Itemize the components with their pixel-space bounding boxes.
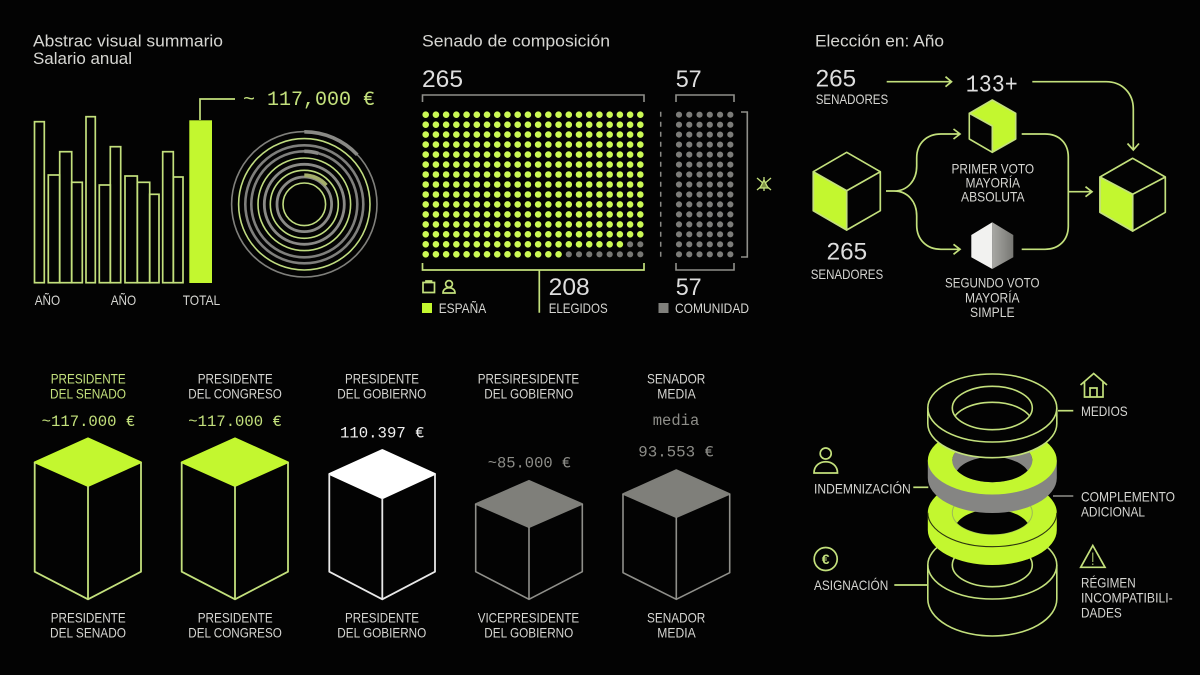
label: primer voto: MAYORÍA (966, 174, 1021, 190)
label: primer voto: PRIMER VOTO (952, 160, 1034, 176)
top label: PRESIDENTE (345, 370, 419, 386)
bottom label: DEL GOBIERNO (337, 625, 426, 641)
bar chart: yearly outline bars (34, 117, 183, 283)
axis labels: AÑO (111, 292, 136, 308)
column: presidente del congreso (182, 370, 288, 641)
cube: result (1100, 158, 1165, 231)
value label: ~ 117,000 € (243, 89, 375, 112)
axis labels: AÑO (35, 292, 60, 308)
top label: DEL SENADO (50, 385, 126, 401)
dot matrix: community seats (679, 115, 730, 254)
ring: green lower (927, 496, 1058, 565)
top label (478, 370, 579, 401)
icon: document (423, 281, 434, 292)
number 208 elegidos (549, 274, 608, 316)
arrow to result cube (1032, 82, 1139, 150)
label: regimen: DADES (1081, 604, 1122, 620)
panel: salario anual (33, 32, 377, 308)
top label (647, 370, 705, 401)
cube: second vote (971, 222, 1013, 269)
icon: warning (1081, 546, 1105, 567)
column: presidente del senado (35, 370, 141, 641)
top label (188, 370, 282, 401)
label: primer voto (952, 160, 1034, 204)
cube (182, 438, 288, 599)
dashed divider (660, 112, 662, 257)
label: segundo voto (945, 275, 1040, 320)
label: primer voto: ABSOLUTA (961, 188, 1025, 204)
axis labels: TOTAL (183, 292, 220, 308)
label: regimen: RÉGIMEN (1081, 574, 1136, 590)
cube (35, 438, 141, 599)
bottom label: PRESIDENTE (51, 610, 126, 626)
number 57 top: 57 (676, 66, 702, 93)
legend: comunidad: COMUNIDAD (675, 300, 749, 316)
label: asignacion: ASIGNACIÓN (814, 577, 888, 593)
top label: PRESIDENTE (51, 370, 126, 386)
cube: start (813, 152, 880, 230)
ring: top outline (928, 374, 1057, 458)
bottom label: PRESIDENTE (345, 610, 419, 626)
bottom label: DEL GOBIERNO (484, 625, 573, 641)
radial ring chart (232, 132, 377, 277)
value: ~117.000 € (188, 413, 282, 431)
bottom label: MEDIA (657, 625, 696, 641)
total bar (189, 120, 212, 283)
number 208 elegidos: 208 (549, 274, 590, 301)
label: complemento adicional: COMPLEMENTO (1081, 489, 1175, 505)
brackets (422, 95, 747, 270)
icon: person (814, 448, 838, 473)
bottom label: SENADOR (647, 610, 705, 626)
column: vicepresidente del gobierno (476, 370, 582, 641)
label: segundo voto: MAYORÍA (965, 289, 1020, 305)
value: 93.553 € (638, 444, 714, 462)
value: ~85.000 € (488, 455, 571, 473)
number 265 senadores bottom: SENADORES (811, 266, 883, 282)
panel: ring stack (814, 374, 1175, 636)
number 265 senadores top: 265 (816, 66, 856, 93)
bottom label: PRESIDENTE (198, 610, 273, 626)
top label: DEL GOBIERNO (484, 385, 573, 401)
label: complemento adicional: ADICIONAL (1081, 504, 1145, 520)
number 57 bottom: 57 (676, 274, 702, 301)
number 133+: 133+ (966, 72, 1018, 100)
arrow to 133+ (887, 77, 952, 87)
icon: person (443, 281, 455, 293)
label: medios: MEDIOS (1081, 403, 1128, 419)
heading: composicion: Senado de composición (422, 32, 610, 50)
axis labels (35, 292, 220, 308)
label: complemento adicional (1053, 489, 1175, 520)
branch arrows (886, 129, 960, 254)
top label: DEL CONGRESO (188, 385, 282, 401)
ring: bottom outline (928, 531, 1057, 636)
cube (329, 450, 435, 599)
bottom label (188, 610, 282, 641)
number 265 senadores bottom (811, 238, 883, 282)
column: presidente del gobierno (329, 370, 435, 641)
heading: salario anual: Abstrac visual summario (33, 32, 223, 50)
number 265 senadores top: SENADORES (816, 91, 888, 107)
number 265 senadores bottom: 265 (827, 238, 867, 266)
panel: comparativa de salarios (35, 370, 730, 641)
dot matrix: Spain seats (426, 115, 640, 254)
cube: first vote (969, 100, 1016, 152)
number 265: 265 (422, 66, 463, 93)
top label (50, 370, 126, 401)
bottom label (50, 610, 126, 641)
heading: salario anual: Salario anual (33, 50, 132, 68)
dot matrix: remaining grey seats (569, 244, 640, 254)
ring: green with grey wall (928, 442, 1057, 513)
legend: España (422, 300, 487, 316)
bottom label: VICEPRESIDENTE (478, 610, 579, 626)
bottom label: DEL SENADO (50, 625, 126, 641)
icon: asterisk (757, 177, 771, 191)
media label: media (653, 412, 699, 430)
icon: euro (814, 548, 837, 570)
legend: España: ESPAÑA (439, 300, 487, 316)
label: medios (1058, 403, 1128, 419)
number 265 senadores top (816, 66, 888, 107)
top label: MEDIA (657, 385, 696, 401)
label: regimen (1081, 574, 1173, 620)
green bracket and divider (422, 263, 644, 313)
panel: senado de composicion (422, 32, 771, 316)
bottom label (337, 610, 426, 641)
label: segundo voto: SEGUNDO VOTO (945, 275, 1040, 291)
label: segundo voto: SIMPLE (970, 304, 1015, 320)
heading: salario anual (33, 32, 223, 68)
bottom label: DEL CONGRESO (188, 625, 282, 641)
top label (337, 370, 426, 401)
label: indemnizacion: INDEMNIZACIÓN (814, 480, 911, 496)
callout leader line (200, 99, 235, 120)
label: regimen: INCOMPATIBILI- (1081, 589, 1173, 605)
icon: euro: € (822, 551, 830, 567)
icon: house (1080, 374, 1107, 397)
cube (476, 481, 582, 599)
top label: PRESIRESIDENTE (478, 370, 579, 386)
value: 110.397 € (340, 424, 424, 442)
top label: PRESIDENTE (198, 370, 273, 386)
panel: eleccion (811, 32, 1165, 320)
number 208 elegidos: ELEGIDOS (549, 300, 608, 316)
heading: eleccion: Elección en: Año (815, 32, 944, 50)
bottom label (478, 610, 579, 641)
merge arrows (1022, 134, 1092, 249)
top label: SENADOR (647, 370, 705, 386)
column: senador media (623, 370, 730, 641)
cube (623, 470, 730, 599)
value: ~117.000 € (42, 413, 135, 431)
bottom label (647, 610, 705, 641)
top label: DEL GOBIERNO (337, 385, 426, 401)
